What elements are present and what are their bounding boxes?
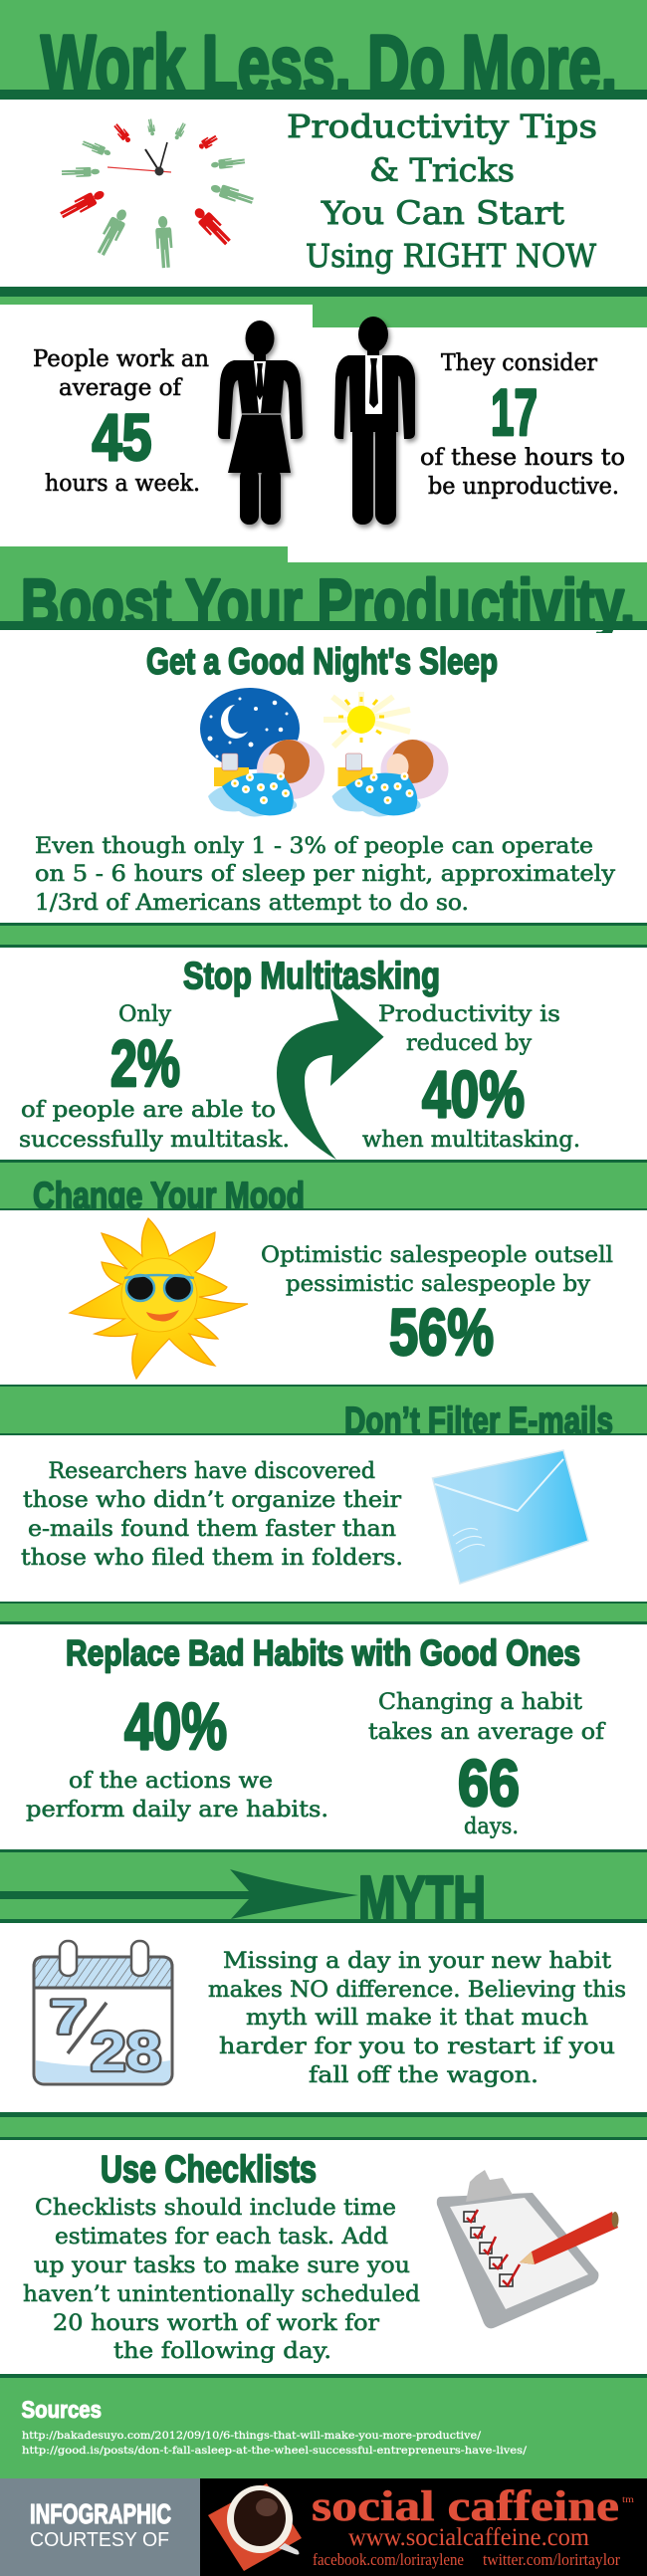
text: researchers: those who didn’t organize their [23,1488,402,1513]
arrow: curved [277,988,384,1160]
text: 45 hours [33,346,209,497]
text: optimistic salespeople: pessimistic salespeople by [286,1272,591,1297]
text: courtesy [30,2498,171,2551]
text: 45 hours: average of [59,375,182,401]
text: sleep statistic [35,834,616,916]
arrow: myth pointer [0,1869,358,1919]
text: 17 unproductive: of these hours to [420,445,625,471]
text: optimistic salespeople: 56% [389,1295,494,1369]
text: social caffeine logo: social caffeine [312,2483,619,2530]
text: 66 days: Changing a habit [378,1690,582,1715]
icon: envelope [432,1450,588,1584]
text: 2 percent: of people are able to [21,1098,276,1123]
panel: header [0,18,647,297]
icon: man figure [334,317,415,525]
text: calendar date: 7 [50,1992,87,2044]
text: researchers: e-mails found them faster than [28,1517,396,1542]
heading: productivity tips: & Tricks [369,151,515,189]
text: sleep statistic: on 5 - 6 hours of sleep per night, approximately [35,862,616,887]
icon: clipboard [437,2170,619,2328]
icon: clock of people [59,118,255,268]
text: researchers [21,1459,403,1571]
text: calendar date [50,1992,161,2082]
icon: sun with sunglasses [70,1218,248,1379]
text: myth explanation: Missing a day in your new habit [223,1949,611,1974]
text: source links [22,2430,528,2457]
text: 40 percent habits: 40% [124,1689,227,1763]
panel: hours worked [0,305,647,562]
text: 66 days: takes an average of [368,1720,606,1745]
panel: myth [0,1862,647,2140]
text: courtesy: INFOGRAPHIC [30,2498,171,2529]
icon: woman figure [218,321,303,525]
text: 40 percent habits: perform daily are habits. [26,1798,328,1823]
text: calendar date: 28 [91,2020,161,2082]
panel: stop multitasking [0,948,647,1163]
text: 40 percent habits: of the actions we [69,1769,273,1794]
text: checklists: 20 hours worth of work for [53,2311,380,2336]
heading: mood: Change Your Mood [33,1176,305,1217]
text: optimistic salespeople [261,1243,613,1369]
text: checklists: the following day. [113,2339,331,2364]
icon: coffee cup [208,2483,302,2571]
text: sleep statistic: Even though only 1 - 3% of people can operate [35,834,593,859]
text: source links: http://bakadesuyo.com/2012/09/10/6-things-that-will-make-you-more-productive/ [22,2430,481,2442]
heading: myth: MYTH [358,1862,486,1935]
text: checklists: Checklists should include time [35,2196,396,2221]
text: 2 percent: successfully multitask. [19,1128,290,1153]
heading: productivity tips: Productivity Tips [287,107,597,145]
text: 17 unproductive [420,350,625,500]
text: 40 percent: reduced by [406,1031,533,1056]
text: 40 percent: when multitasking. [362,1128,580,1153]
panel: use checklists [0,2140,647,2378]
text: 66 days: days. [464,1815,519,1839]
text: 45 hours: hours a week. [45,471,200,497]
text: social caffeine logo: facebook.com/loriraylene [313,2550,464,2569]
panel: sleep [0,630,647,948]
text: 40 percent: Productivity is [378,1002,560,1027]
icon: calendar [34,1941,172,2084]
text: source links: http://good.is/posts/don-t-fall-asleep-at-the-wheel-successful-entrepreneurs-have-lives/ [22,2445,528,2457]
text: courtesy: COURTESY OF [30,2529,169,2551]
text: social caffeine logo: twitter.com/lorirtaylor [483,2550,620,2569]
heading: multitasking: Stop Multitasking [183,956,440,997]
text: myth explanation [208,1949,626,2088]
panel: footer [0,2478,647,2576]
text: 66 days [368,1690,606,1839]
text: optimistic salespeople: Optimistic salespeople outsell [261,1243,613,1268]
heading: productivity tips: Using RIGHT NOW [306,237,596,275]
panel: change your mood [0,1176,647,1387]
text: 2 percent [19,1002,290,1153]
heading: sleep: Get a Good Night's Sleep [146,641,498,682]
text: myth explanation: myth will make it that much [246,2006,588,2031]
text: myth explanation: makes NO difference. Believing this [208,1978,626,2003]
heading: productivity tips: You Can Start [321,194,564,232]
heading: checklists: Use Checklists [101,2149,317,2191]
text: checklists: haven’t unintentionally scheduled [23,2282,420,2307]
text: 66 days: 66 [458,1746,520,1820]
heading: productivity tips [287,107,597,275]
text: myth explanation: harder for you to restart if you [219,2035,615,2059]
heading: sources: Sources [22,2397,102,2424]
text: researchers: those who filed them in folders. [21,1546,403,1571]
panel: don't filter e-mails [0,1400,647,1604]
text: 2 percent: 2% [110,1026,180,1100]
text: 2 percent: Only [118,1002,172,1027]
text: 17 unproductive: 17 [491,375,538,449]
text: 45 hours: 45 [92,400,151,474]
text: checklists: up your tasks to make sure you [34,2254,410,2278]
panel: replace bad habits [0,1621,647,1852]
text: 45 hours: People work an [33,346,209,372]
text: social caffeine logo [312,2483,634,2569]
text: 40 percent: 40% [422,1057,525,1131]
text: myth explanation: fall off the wagon. [309,2063,539,2088]
icon: sleeping children [200,688,448,816]
text: sleep statistic: 1/3rd of Americans attempt to do so. [35,891,469,916]
text: 40 percent habits [26,1689,328,1823]
panel: sources [22,2397,528,2457]
text: 40 percent [362,1002,580,1153]
text: social caffeine logo: www.socialcaffeine.com [348,2524,590,2551]
text: 17 unproductive: They consider [441,350,597,376]
text: researchers: Researchers have discovered [48,1459,375,1484]
text: checklists [23,2196,420,2364]
text: 17 unproductive: be unproductive. [428,474,619,500]
text: social caffeine logo: tm [622,2494,634,2504]
text: checklists: estimates for each task. Add [55,2225,388,2250]
